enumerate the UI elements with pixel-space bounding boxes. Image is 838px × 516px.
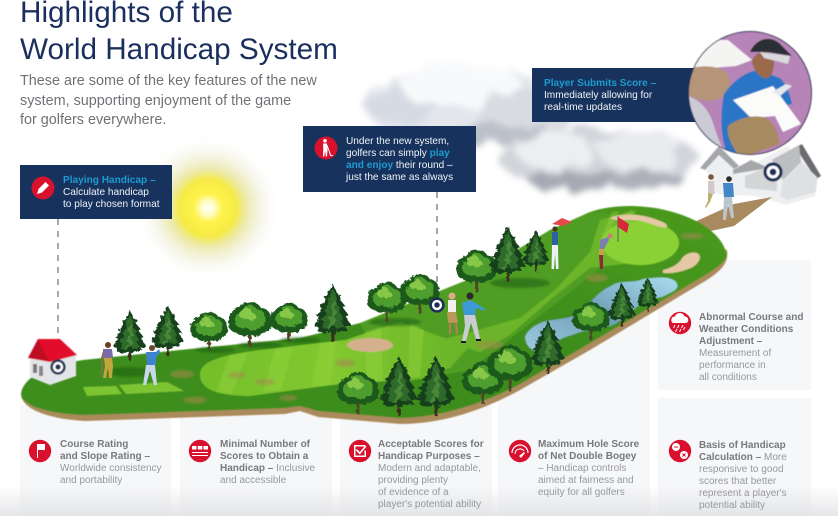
icon: golfer: [314, 136, 338, 160]
golfer: man in blue on fairway: [461, 292, 485, 343]
illustration: back row of trees: [113, 226, 549, 361]
icon: pencil: [32, 176, 54, 200]
fairway mowing stripes: [216, 210, 636, 394]
icon: checkbox: [349, 440, 371, 462]
sun: [134, 134, 282, 282]
feature: basis of handicap calculation: Calculation – More: [699, 452, 787, 463]
feature: abnormal course and weather: [669, 312, 803, 383]
feature: maximum hole score: Maximum Hole Score: [538, 439, 640, 450]
tree shadows: [106, 278, 550, 377]
feature: basis of handicap calculation: Basis of Handicap: [699, 440, 786, 451]
icon: target: [50, 359, 66, 375]
feature: abnormal course and weather: performance in: [699, 360, 766, 371]
feature: basis of handicap calculation: [669, 440, 787, 511]
feature: acceptable scores: providing plenty: [378, 475, 448, 486]
illustration: house at finish: [700, 144, 821, 205]
icon: scorecard: [189, 440, 211, 462]
putting green: [601, 221, 679, 265]
callout: playing handicap: to play chosen format: [63, 199, 160, 210]
dashed leader: playing handicap: [57, 219, 59, 362]
intro text: These are some of the key features of the new: [20, 73, 317, 89]
main fairway: [200, 322, 470, 396]
feature: abnormal course and weather: all conditions: [699, 372, 757, 383]
panels: feature card backgrounds: [20, 260, 811, 516]
feature: basis of handicap calculation: represent a player's: [699, 488, 787, 499]
tee boxes: [83, 386, 122, 396]
bunkers: [347, 338, 393, 352]
callout: player submits score: Player Submits Score –: [544, 78, 657, 89]
callout: playing handicap: Playing Handicap –: [63, 175, 156, 186]
intro text: system, supporting enjoyment of the game: [20, 93, 291, 109]
intro text: for golfers everywhere.: [20, 112, 166, 128]
icon: flag: [29, 440, 51, 462]
feature: acceptable scores: Modern and adaptable,: [378, 463, 481, 474]
feature: course rating: [29, 439, 162, 486]
illustration: front row of trees: [337, 278, 659, 416]
callout: playing handicap: Calculate handicap: [63, 187, 149, 198]
feature: acceptable scores: player's potential ability: [378, 499, 481, 510]
callout: play and enjoy: and enjoy their round –: [346, 160, 453, 171]
callout: playing handicap: [20, 165, 172, 219]
feature: acceptable scores: Acceptable Scores for: [378, 439, 484, 450]
player photo circle: [688, 30, 814, 158]
pond: [525, 277, 677, 351]
callout: play and enjoy: just the same as always: [345, 172, 453, 183]
feature: course rating: Course Rating: [60, 439, 128, 450]
icon: house at start: [28, 339, 77, 385]
callout: player submits score: real-time updates: [544, 102, 622, 113]
lighter rough: [360, 212, 660, 385]
icon: target: [763, 162, 783, 182]
feature: abnormal course and weather: Adjustment –: [699, 336, 763, 347]
icon: rain cloud: [669, 312, 691, 334]
title: [20, 0, 338, 66]
golfer: purple top at tee: [101, 342, 113, 378]
golfer: putting: [599, 233, 613, 269]
illustration: path to house: [690, 197, 772, 232]
feature: course rating: and portability: [60, 475, 122, 486]
golfer: man with umbrella: [552, 218, 572, 269]
dashed leader: play and enjoy: [436, 192, 438, 292]
feature: basis of handicap calculation: potential ability: [699, 500, 765, 511]
feature: basis of handicap calculation: responsive to good: [699, 464, 784, 475]
feature: minimal number of scores: Handicap – Inclusive: [220, 463, 315, 474]
feature: basis of handicap calculation: scores that better: [699, 476, 777, 487]
icon: gauge: [509, 440, 531, 462]
golfer: woman on fairway: [447, 292, 458, 334]
upper fairway: [440, 212, 668, 352]
icon: target on course: [429, 297, 445, 313]
feature: acceptable scores: of evidence of a: [378, 487, 449, 498]
cloud: [364, 61, 698, 189]
feature: maximum hole score: [509, 439, 640, 498]
feature: course rating: and Slope Rating –: [60, 451, 150, 462]
illustration: golf course land: [21, 206, 727, 424]
feature: abnormal course and weather: Weather Conditions: [699, 324, 794, 335]
flag on green: [618, 216, 629, 242]
feature: acceptable scores: [349, 439, 484, 510]
feature: abnormal course and weather: Abnormal Course and: [699, 312, 803, 323]
golfer: blue top at tee: [143, 345, 160, 385]
icon: scoring circles: [669, 440, 691, 462]
feature: minimal number of scores: [189, 439, 315, 486]
feature: maximum hole score: of Net Double Bogey: [538, 451, 637, 462]
bottom fade: [0, 485, 838, 516]
intro text: [20, 73, 317, 128]
feature: minimal number of scores: Minimal Number of: [220, 439, 311, 450]
feature: maximum hole score: equity for all golfers: [538, 487, 625, 498]
feature: abnormal course and weather: Measurement of: [699, 348, 771, 359]
callout: player submits score: [532, 68, 702, 122]
feature: course rating: Worldwide consistency: [60, 463, 162, 474]
rough dirt patches: [170, 233, 704, 404]
feature: maximum hole score: aimed at fairness and: [538, 475, 634, 486]
feature: maximum hole score: – Handicap controls: [538, 463, 626, 474]
land base edge: [21, 240, 727, 424]
feature: acceptable scores: Handicap Purposes –: [378, 451, 480, 462]
title: World Handicap System: [20, 33, 338, 66]
feature: minimal number of scores: and accessible: [220, 475, 287, 486]
land surface: [21, 206, 727, 418]
golfers walking to house: [705, 174, 734, 220]
feature: minimal number of scores: Scores to Obtain a: [220, 451, 309, 462]
callout: play and enjoy: Under the new system,: [346, 136, 449, 147]
callout: play and enjoy: golfers can simply play: [346, 148, 450, 159]
callout: play and enjoy: [303, 126, 476, 192]
callout: player submits score: Immediately allowing for: [544, 90, 653, 101]
